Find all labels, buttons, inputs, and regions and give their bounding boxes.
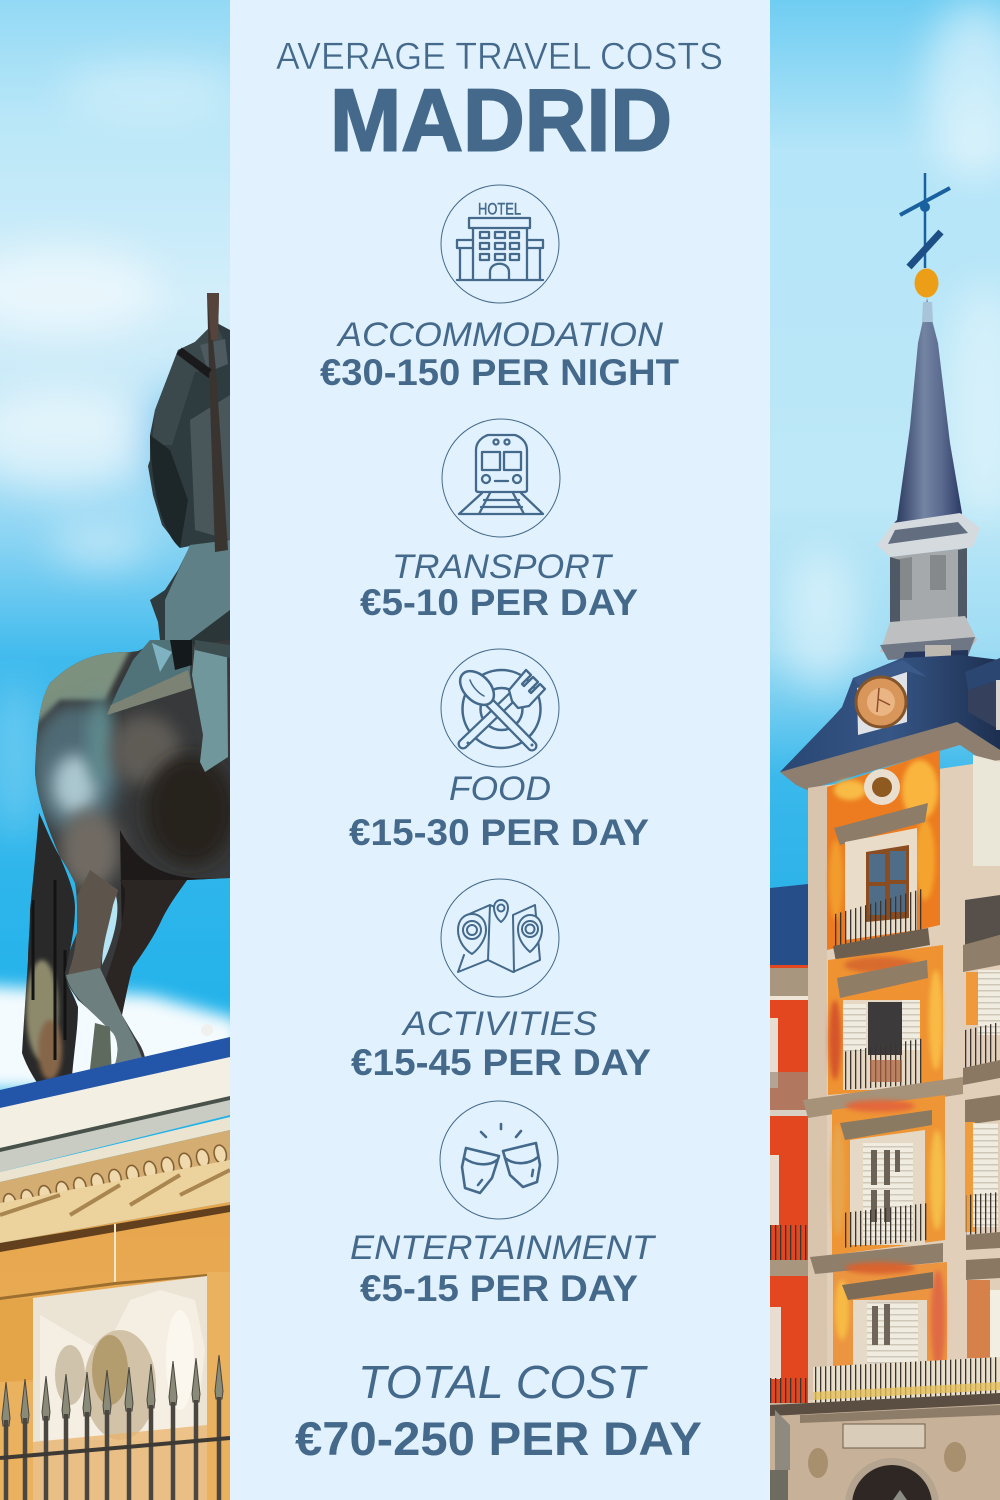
title: average travel costs: AVERAGE TRAVEL COSTS bbox=[276, 36, 723, 78]
item: transport bbox=[360, 419, 638, 623]
item: food bbox=[349, 649, 649, 853]
label: entertainment: ENTERTAINMENT bbox=[350, 1229, 656, 1267]
rider leg bbox=[192, 645, 228, 772]
fork bbox=[463, 697, 512, 744]
right bay bbox=[965, 895, 1000, 945]
statue bbox=[22, 293, 235, 1090]
side wing roof bbox=[770, 884, 808, 970]
red wing bbox=[770, 965, 815, 1500]
right sky bbox=[770, 0, 1000, 888]
second floor bbox=[828, 945, 943, 1095]
item: accommodation bbox=[320, 185, 679, 393]
icon: map with pins bbox=[441, 879, 559, 997]
icon: hotel bbox=[441, 185, 559, 303]
item: entertainment bbox=[350, 1101, 656, 1309]
clock face bbox=[856, 677, 906, 727]
icon: train bbox=[442, 419, 560, 537]
cost: food: €15-30 PER DAY bbox=[349, 812, 649, 853]
spoon bbox=[488, 701, 532, 746]
label: transport: TRANSPORT bbox=[392, 548, 613, 586]
label: accommodation: ACCOMMODATION bbox=[336, 316, 663, 354]
label: total cost: TOTAL COST bbox=[358, 1356, 648, 1408]
cost: transport: €5-10 PER DAY bbox=[360, 582, 638, 623]
spire bbox=[893, 298, 962, 524]
photo: Plaza Mayor tower bbox=[770, 0, 1000, 1500]
golden ball bbox=[914, 268, 938, 298]
third floor bbox=[832, 1095, 945, 1255]
stone piers bbox=[808, 760, 1000, 1410]
fourth floor bbox=[833, 1262, 947, 1366]
upper orange wall bbox=[827, 750, 940, 950]
label: food: FOOD bbox=[449, 770, 551, 808]
icon: hotel: HOTEL bbox=[478, 200, 521, 218]
main slate roof bbox=[780, 655, 1000, 787]
pedestal bbox=[0, 1024, 230, 1500]
cost: total: €70-250 PER DAY bbox=[295, 1412, 702, 1465]
central text panel bbox=[230, 0, 770, 1500]
tail bbox=[22, 813, 78, 1090]
upper balcony bbox=[835, 888, 925, 948]
weather vane cross bbox=[900, 173, 950, 268]
iron fence bbox=[0, 1355, 230, 1500]
tower facade bbox=[803, 750, 1000, 1410]
cost: activities: €15-45 PER DAY bbox=[351, 1042, 651, 1083]
saddle cloth bbox=[107, 640, 192, 715]
long balcony bbox=[813, 1357, 1000, 1403]
item: activities bbox=[351, 879, 651, 1083]
icon: fork, spoon and plate bbox=[441, 649, 559, 767]
cost: entertainment: €5-15 PER DAY bbox=[360, 1268, 638, 1309]
octagonal drum bbox=[877, 513, 980, 700]
ground floor arcade bbox=[770, 1393, 1000, 1500]
sky gap between legs bbox=[102, 896, 117, 965]
staff bbox=[207, 293, 228, 552]
label: activities: ACTIVITIES bbox=[401, 1005, 597, 1043]
horse body bbox=[35, 640, 230, 1070]
cost: accommodation: €30-150 PER NIGHT bbox=[320, 352, 679, 393]
mural upper right bbox=[973, 755, 1000, 866]
heading: Madrid: MADRID bbox=[330, 70, 672, 170]
icon: clinking glasses bbox=[440, 1101, 558, 1219]
rider bbox=[137, 324, 230, 652]
rear supporting leg bbox=[90, 1023, 112, 1070]
bracelet bbox=[180, 350, 210, 372]
photo: equestrian statue of Philip III bbox=[0, 0, 240, 1500]
cornice bbox=[780, 722, 1000, 790]
total cost bbox=[295, 1356, 702, 1465]
left sky bbox=[0, 0, 230, 1243]
